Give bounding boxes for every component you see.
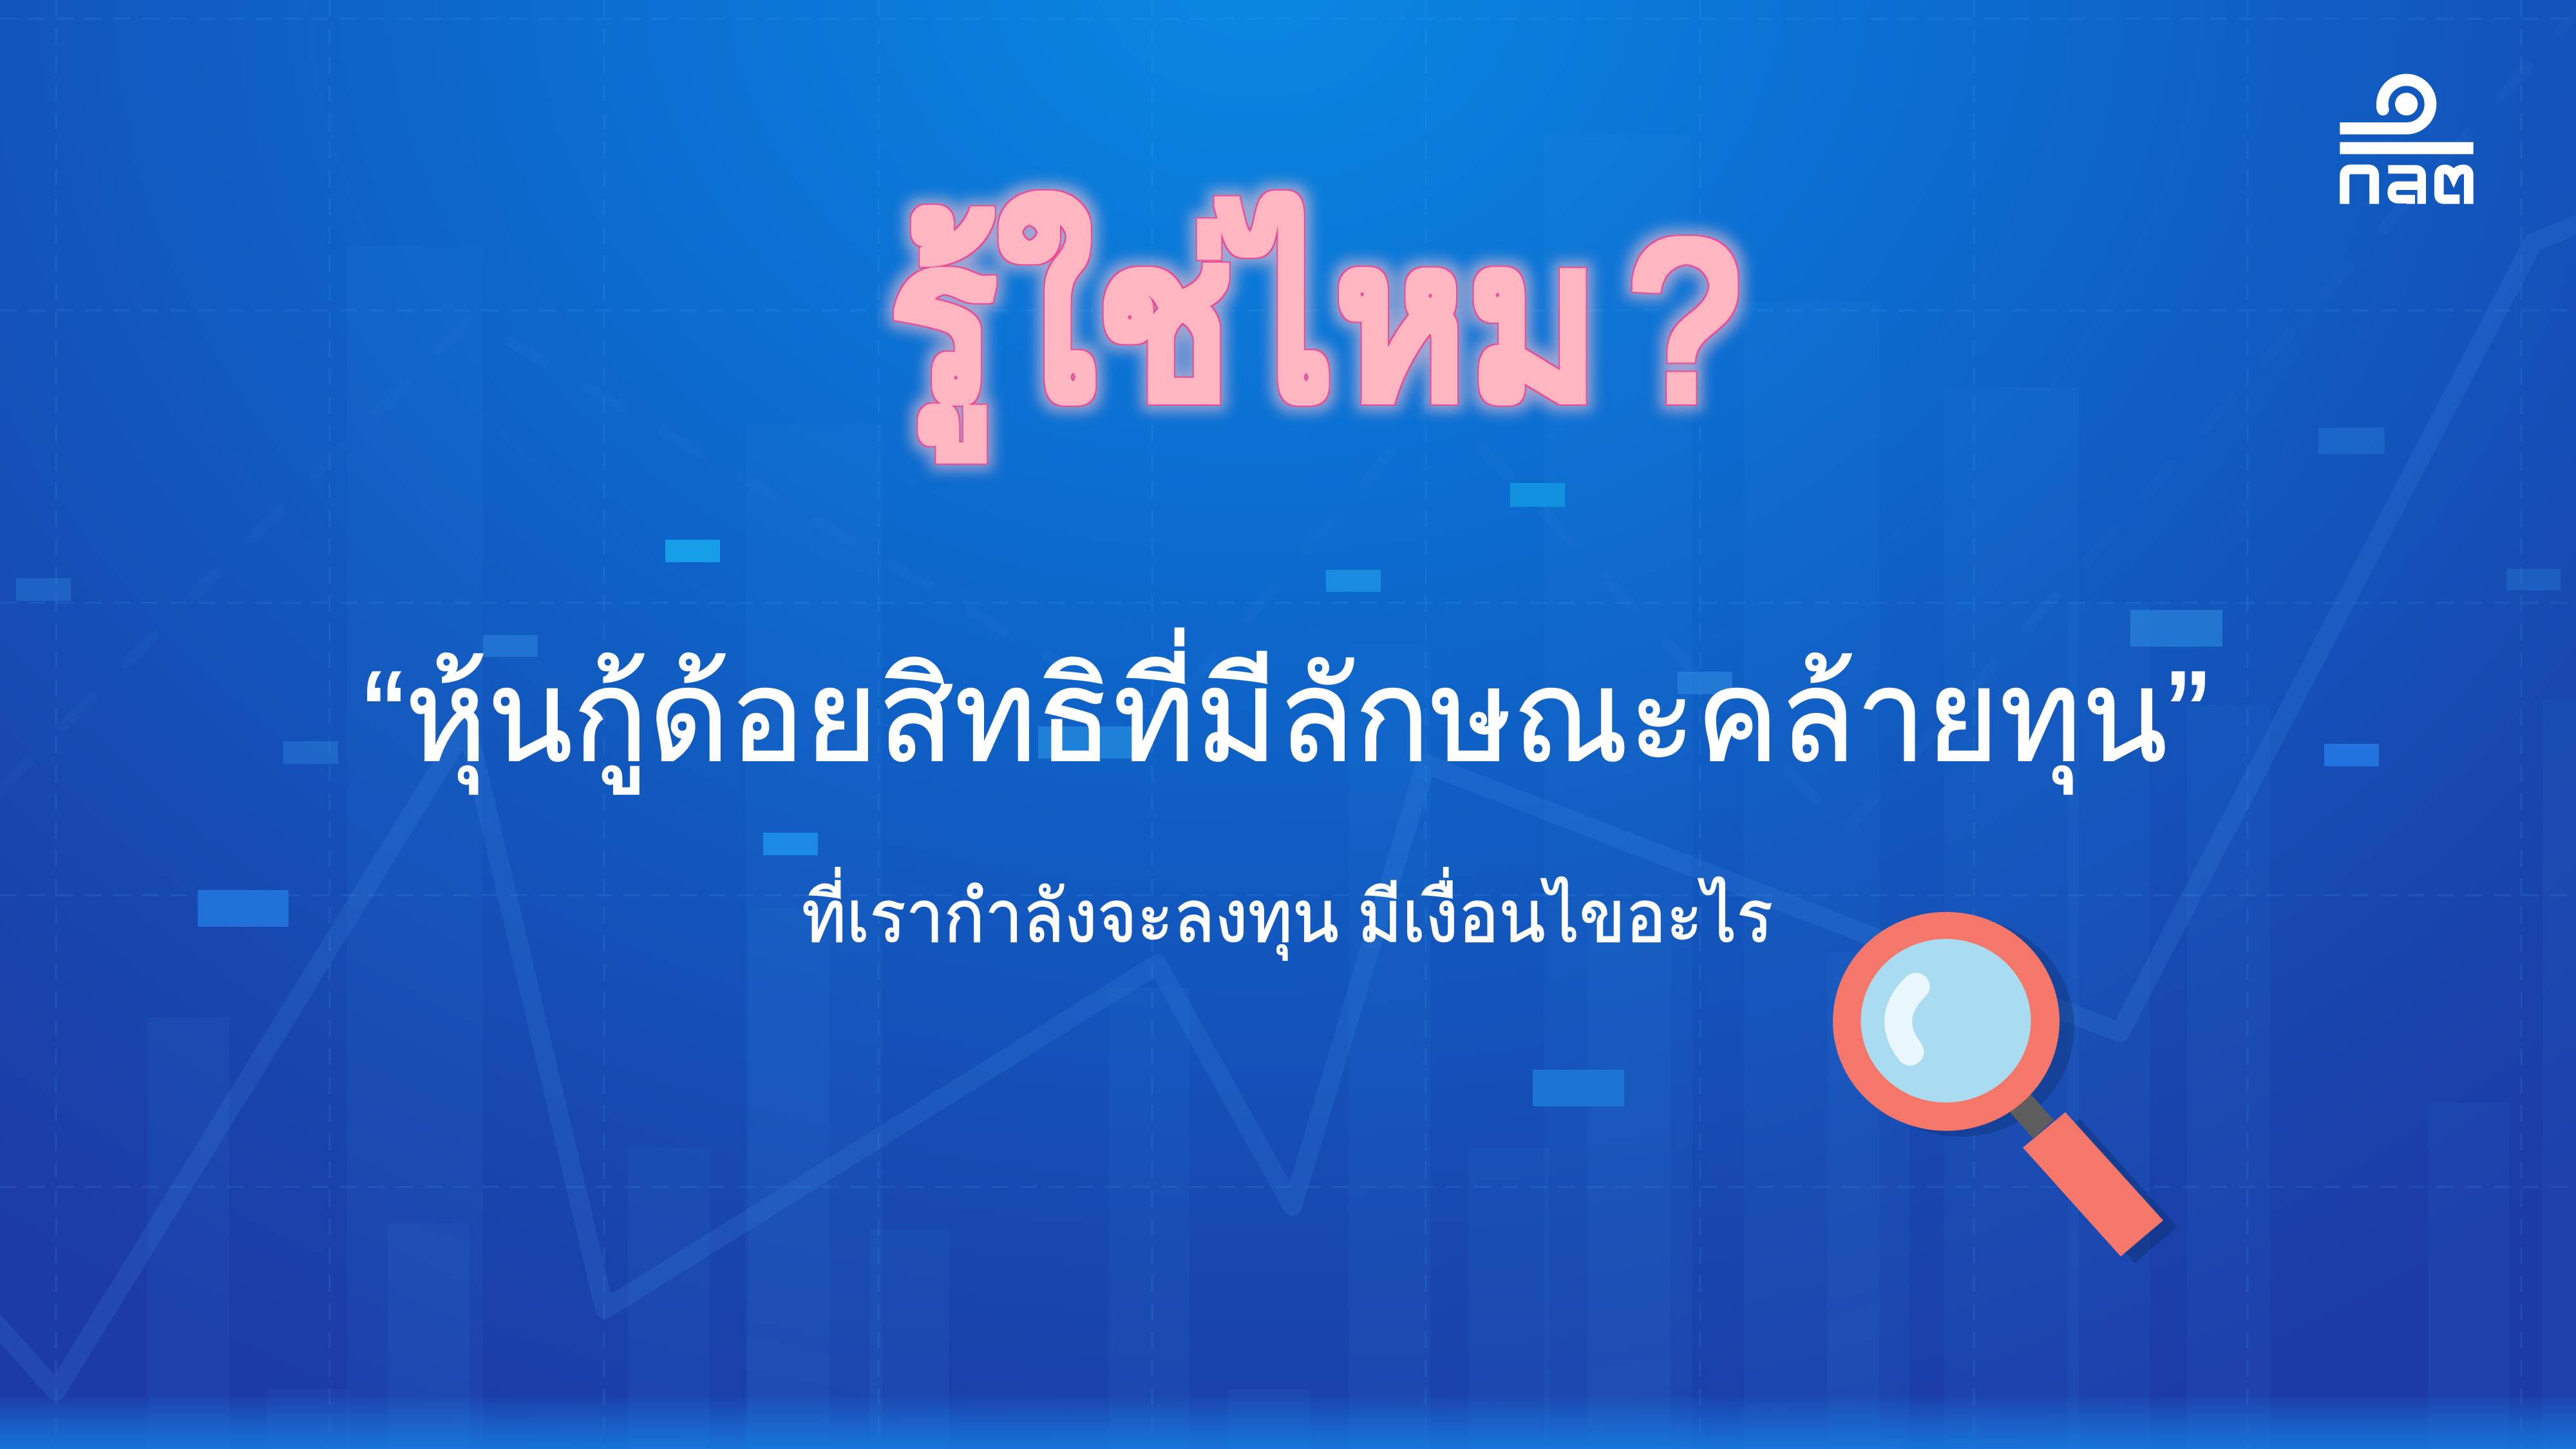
title: ? (1629, 194, 1740, 448)
logo: SEC Thailand (2340, 80, 2474, 204)
faint dashed trend line (0, 13, 2576, 831)
subtitle: “หุ้นกู้ด้อยสิทธิที่มีลักษณะคล้ายทุน” (363, 628, 2209, 795)
question line: ที่เรากำลังจะลงทุน มีเงื่อนไขอะไร (802, 867, 1773, 961)
icon: magnifying glass (1833, 912, 2177, 1263)
bottom glow (0, 1394, 2576, 1449)
title: รู้ใช่ไหม (889, 194, 1600, 460)
floating data blocks (16, 428, 2561, 1106)
